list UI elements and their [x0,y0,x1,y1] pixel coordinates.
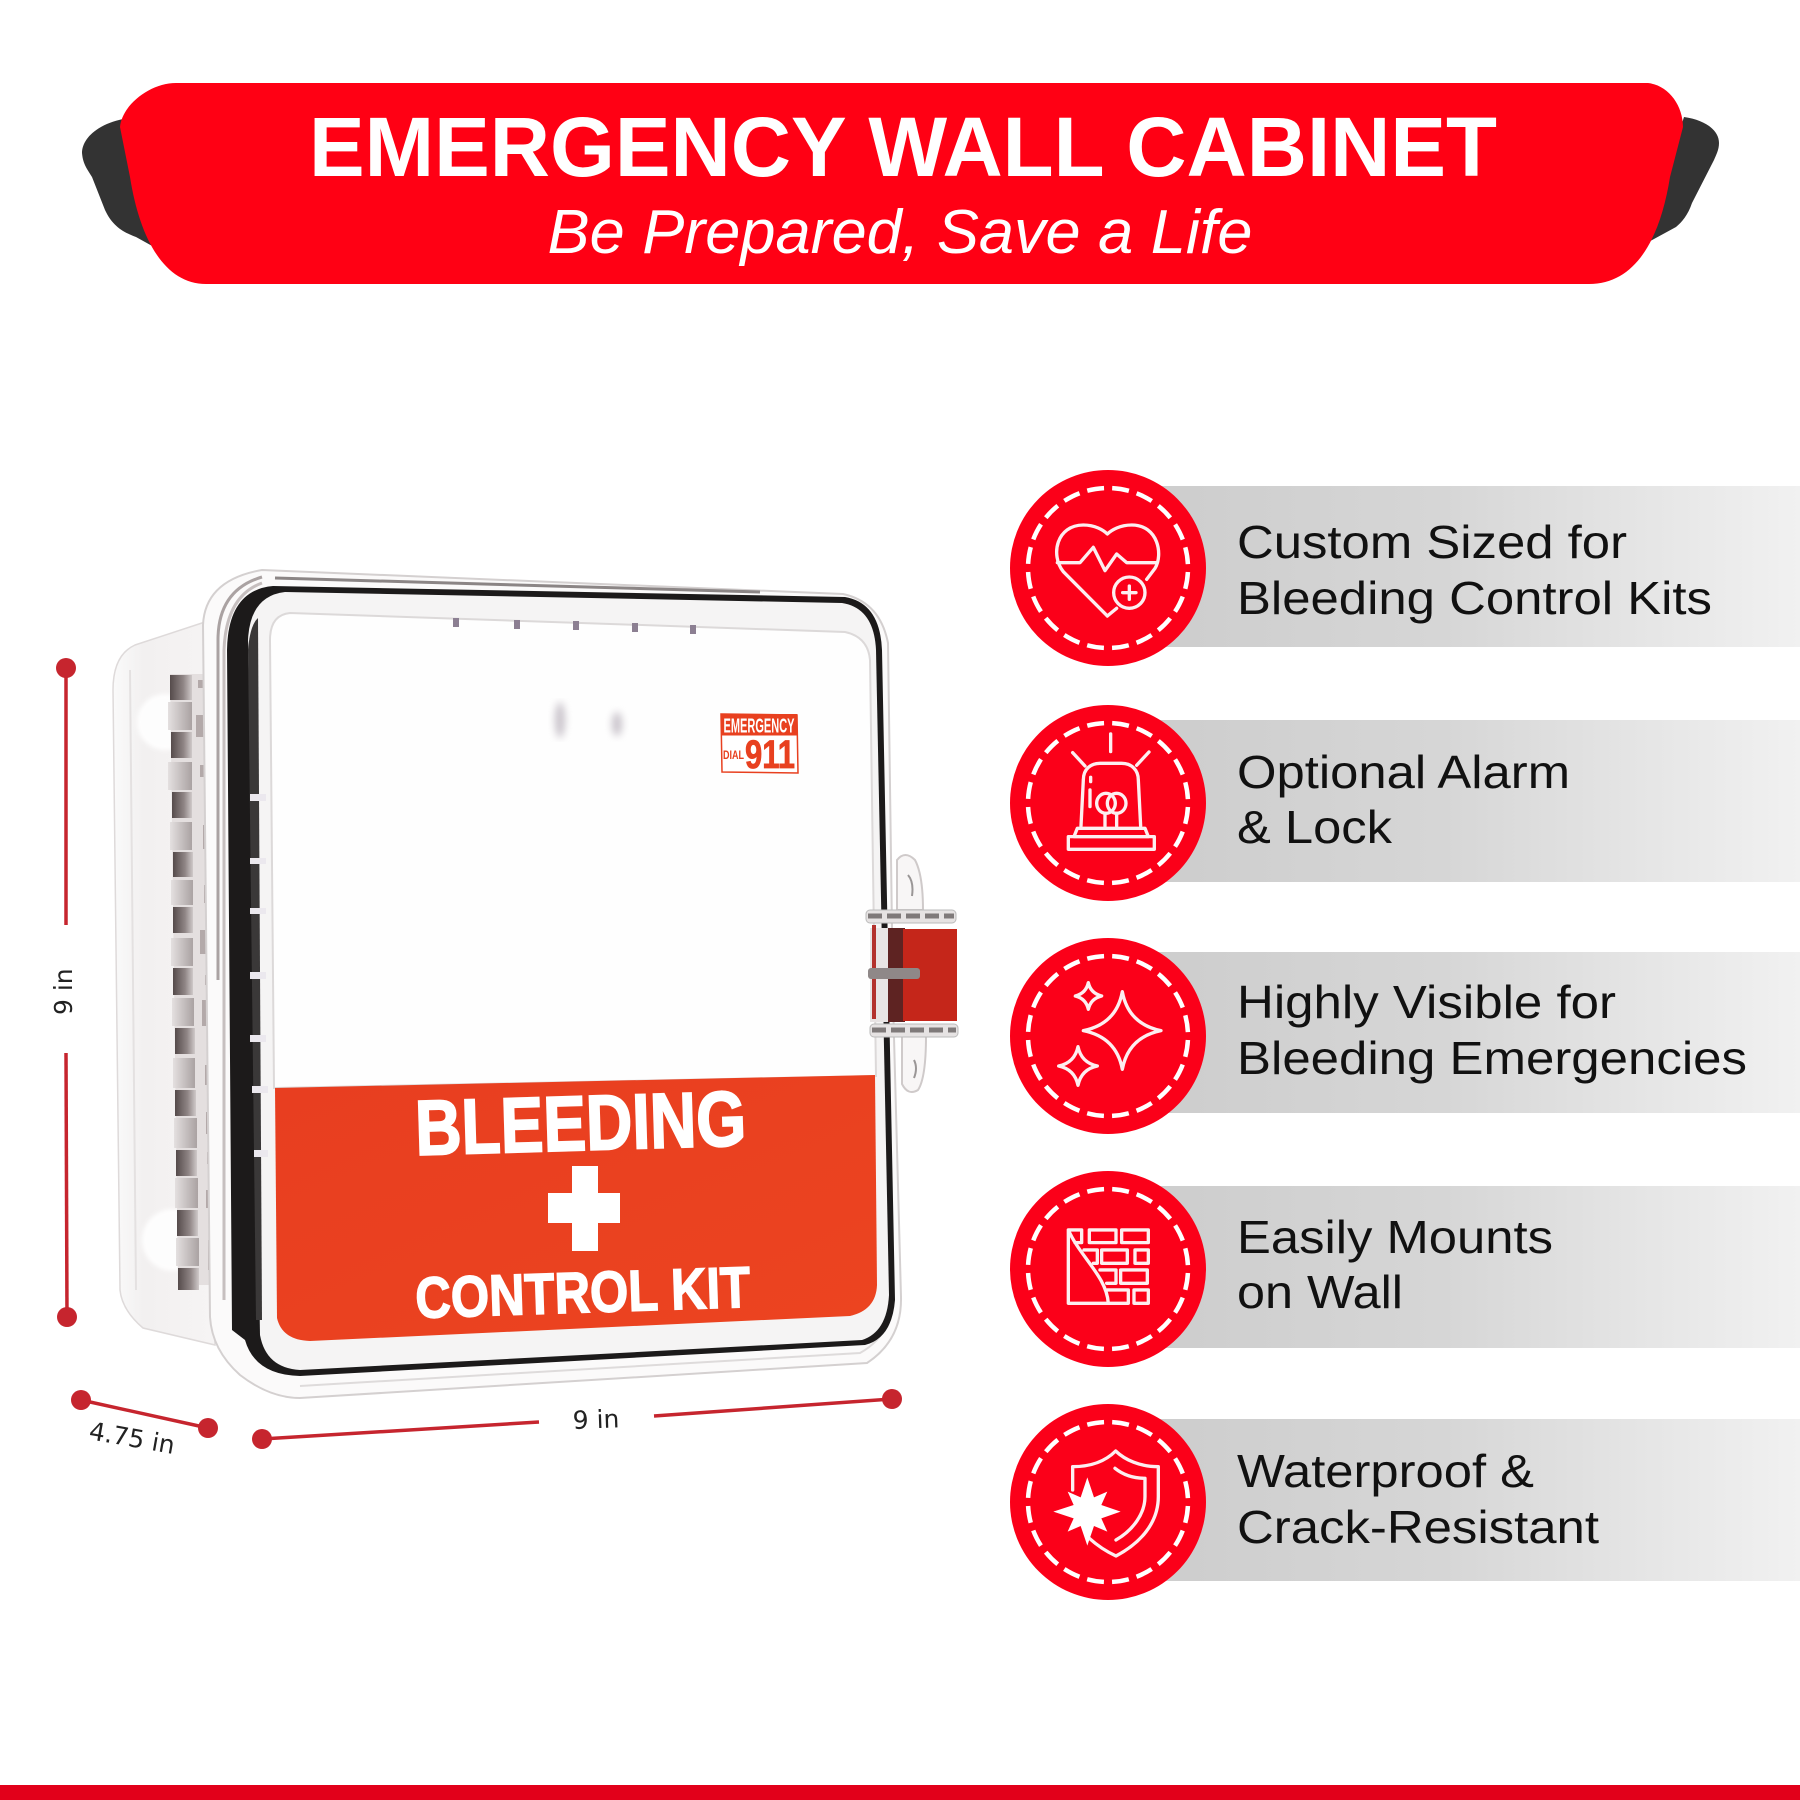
dimension: depth 4.75 in [71,1390,218,1460]
lid highlights [275,578,760,592]
feature text: Waterproof & [1237,1445,1534,1497]
feature text: Bleeding Emergencies [1237,1032,1747,1084]
dimension: height 9 in [49,658,78,1327]
feature text: & Lock [1237,801,1393,853]
feature bar [1150,1186,1800,1348]
suction cup shadow [555,702,622,738]
feature badge [1010,1171,1206,1367]
feature badge [1010,705,1206,901]
top tick marks [453,618,696,634]
red label [275,1074,877,1341]
dimension: width 9 in: 9 in [572,1404,620,1435]
feature text: Bleeding Control Kits [1237,572,1712,624]
bottom red bar [0,1785,1800,1800]
dimension: height 9 in: 9 in [49,968,78,1015]
cabinet lid [203,570,901,1398]
white inner panel [270,613,876,1088]
feature badge [1010,938,1206,1134]
feature badge [1010,1404,1206,1600]
label cross [548,1166,620,1251]
feature: alarm and lock [1010,705,1800,901]
feature bar [1150,952,1800,1113]
feature: custom sized [1010,470,1800,666]
feature text: Optional Alarm [1237,746,1570,798]
back box inner line [130,670,136,1290]
title banner [82,83,1719,284]
cabinet back box [113,622,215,1345]
feature text: on Wall [1237,1266,1403,1318]
feature badge [1010,470,1206,666]
latch ears [897,855,926,1092]
icon: alarm beacon [1068,734,1154,849]
dark strip left of panel [248,618,262,1320]
latch [866,910,958,1037]
feature text: Highly Visible for [1237,976,1616,1028]
banner side tab left [82,119,154,247]
emergency 911 sticker [721,714,798,777]
label text: control kit: CONTROL KIT [414,1255,751,1331]
subheading: Be Prepared, Save a Life [548,198,1252,267]
feature text: Easily Mounts [1237,1211,1553,1263]
icon: heart with plus [1057,525,1159,616]
black gasket [227,586,895,1376]
feature: waterproof [1010,1404,1800,1600]
icon: shield with impact star [1053,1451,1158,1556]
dimension: width 9 in [252,1389,902,1449]
icon: sparkles [1059,983,1161,1085]
feature text: Custom Sized for [1237,516,1627,568]
icon: brick wall [1068,1230,1148,1303]
emergency 911 sticker: DIAL [723,748,744,762]
cabinet product image [113,570,958,1398]
banner side tab right [1643,117,1719,245]
lid inner frame [248,592,889,1370]
dimension: depth 4.75 in: 4.75 in [87,1416,177,1460]
emergency 911 sticker: EMERGENCY [724,716,795,738]
clips on strip [250,794,268,1157]
feature text: Crack-Resistant [1237,1501,1599,1553]
label text: bleeding: BLEEDING [414,1074,747,1172]
suction cups on back [137,694,204,1271]
banner ribbon [120,83,1683,284]
hinge [168,674,247,1290]
feature bar [1150,1419,1800,1581]
feature bar [1150,720,1800,882]
feature: highly visible [1010,938,1800,1134]
feature: wall mount [1010,1171,1800,1367]
emergency 911 sticker: 911 [745,733,795,777]
feature bar [1150,486,1800,647]
heading: EMERGENCY WALL CABINET [309,100,1497,194]
